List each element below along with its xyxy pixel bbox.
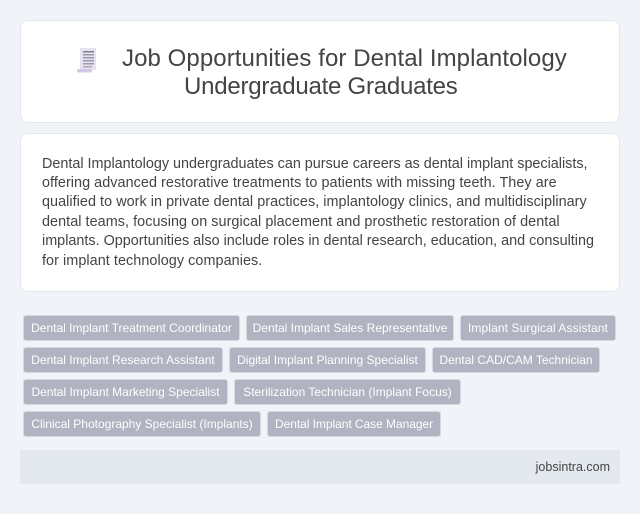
tag: Implant Surgical Assistant: [468, 321, 608, 335]
title line 1: Job Opportunities for Dental Implantology: [122, 45, 567, 72]
tag: [23, 411, 261, 437]
tag: [267, 411, 441, 437]
tag: Dental Implant Sales Representative: [253, 321, 447, 335]
description text: implants. Opportunities also include roles in dental research, education, and consulting: [42, 233, 594, 249]
title line 2: Undergraduate Graduates: [184, 73, 458, 100]
tag: Clinical Photography Specialist (Implants): [31, 417, 253, 431]
tag: Digital Implant Planning Specialist: [237, 353, 418, 367]
tag: [246, 315, 454, 341]
description text: Dental Implantology undergraduates can pursue careers as dental implant specialists,: [42, 156, 588, 172]
description text: qualified to work in private dental practices, implantology clinics, and multidisciplinary: [42, 194, 587, 210]
tag: Dental Implant Treatment Coordinator: [31, 321, 232, 335]
tag: [23, 315, 240, 341]
tag: [234, 379, 461, 405]
description text: for implant technology companies.: [42, 253, 262, 269]
tag: [229, 347, 426, 373]
footer bar: [20, 450, 620, 484]
tag: [432, 347, 600, 373]
tag: Dental Implant Case Manager: [275, 417, 433, 431]
job tags: [23, 315, 616, 437]
tag: [23, 347, 223, 373]
tag: Dental Implant Research Assistant: [31, 353, 215, 367]
panel: title card: [20, 20, 620, 123]
tag: Dental Implant Marketing Specialist: [31, 385, 220, 399]
description text: offering advanced restorative treatments to patients with missing teeth. They are: [42, 175, 557, 191]
icon: document scroll: [77, 48, 96, 72]
description text: [42, 156, 594, 269]
tag: [23, 379, 228, 405]
description text: dental teams, focusing on surgical placement and prosthetic restoration of dental: [42, 214, 560, 230]
tag: [460, 315, 616, 341]
panel: description card: [20, 133, 620, 292]
tag: Dental CAD/CAM Technician: [439, 353, 593, 367]
footer source text: jobsintra.com: [536, 460, 610, 474]
tag: Sterilization Technician (Implant Focus): [243, 385, 452, 399]
